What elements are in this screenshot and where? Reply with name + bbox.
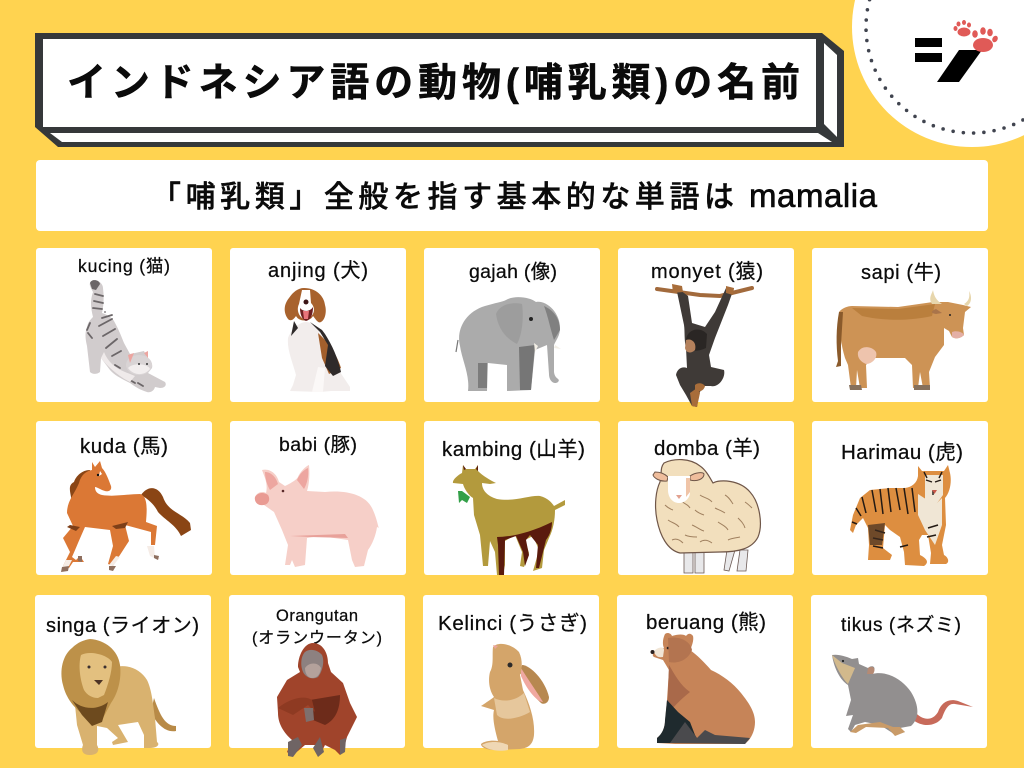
- title text: インドネシア語の動物(哺乳類)の名前: [67, 62, 800, 105]
- label: Harimau: Harimau (虎): [841, 441, 963, 464]
- label: domba: domba (羊): [654, 437, 760, 460]
- icon: rat: [832, 655, 973, 736]
- panel: babi: [230, 421, 406, 575]
- icon: tiger: [850, 465, 951, 566]
- panel: kuda: [36, 421, 212, 575]
- label: kucing: kucing (猫): [78, 256, 170, 276]
- label: kambing: kambing (山羊): [442, 438, 585, 461]
- logo badge: [852, 0, 1024, 147]
- label: anjing: anjing (犬): [268, 259, 368, 282]
- icon: logo bars: [915, 38, 942, 62]
- icon: elephant: [456, 297, 561, 391]
- icon: small paw: [954, 20, 971, 36]
- panel: singa: [35, 595, 211, 755]
- panel: domba: [618, 421, 794, 575]
- label: sapi: sapi (牛): [861, 261, 941, 284]
- panel: tikus: [811, 595, 987, 748]
- label: Orangutan: Orangutan: [276, 607, 358, 625]
- panel: Harimau: [812, 421, 988, 575]
- panel: Orangutan: [229, 595, 405, 757]
- subtitle word: mamalia: mamalia: [749, 177, 878, 214]
- panel: gajah: [424, 248, 600, 402]
- icon: logo slash: [937, 50, 982, 82]
- icon: sheep: [653, 460, 760, 573]
- icon: cow: [836, 290, 971, 390]
- panel: Kelinci: [423, 595, 599, 751]
- label: tikus: tikus (ネズミ): [841, 614, 961, 636]
- label: オランウータン: (オランウータン): [252, 629, 382, 647]
- icon: horse: [61, 461, 191, 572]
- icon: pig: [255, 465, 379, 567]
- label: gajah: gajah (像): [469, 261, 557, 283]
- icon: large paw: [972, 27, 999, 52]
- title box: [35, 33, 844, 147]
- subtitle text: 「哺乳類」全般を指す基本的な単語は: [151, 181, 734, 214]
- label: beruang: beruang (熊): [646, 611, 766, 634]
- icon: chimpanzee: [657, 284, 752, 407]
- label: monyet: monyet (猿): [651, 260, 763, 283]
- icon: orangutan: [277, 643, 357, 757]
- icon: bear: [650, 633, 755, 744]
- panel: monyet: [618, 248, 794, 407]
- panel: sapi: [812, 248, 988, 402]
- panel: anjing: [230, 248, 406, 402]
- icon: rabbit: [481, 644, 549, 751]
- icon: goat: [453, 465, 565, 575]
- panel: kucing: [36, 248, 212, 402]
- icon: dog: [285, 288, 350, 392]
- label: babi: babi (豚): [279, 434, 357, 456]
- panel: beruang: [617, 595, 793, 748]
- icon: lion: [61, 639, 176, 755]
- panel: kambing: [424, 421, 600, 575]
- icon: cat: [86, 280, 166, 392]
- label: singa: singa (ライオン): [46, 615, 199, 637]
- label: kuda: kuda (馬): [80, 435, 168, 458]
- label: Kelinci: Kelinci (うさぎ): [438, 612, 587, 635]
- subtitle banner: [36, 160, 988, 231]
